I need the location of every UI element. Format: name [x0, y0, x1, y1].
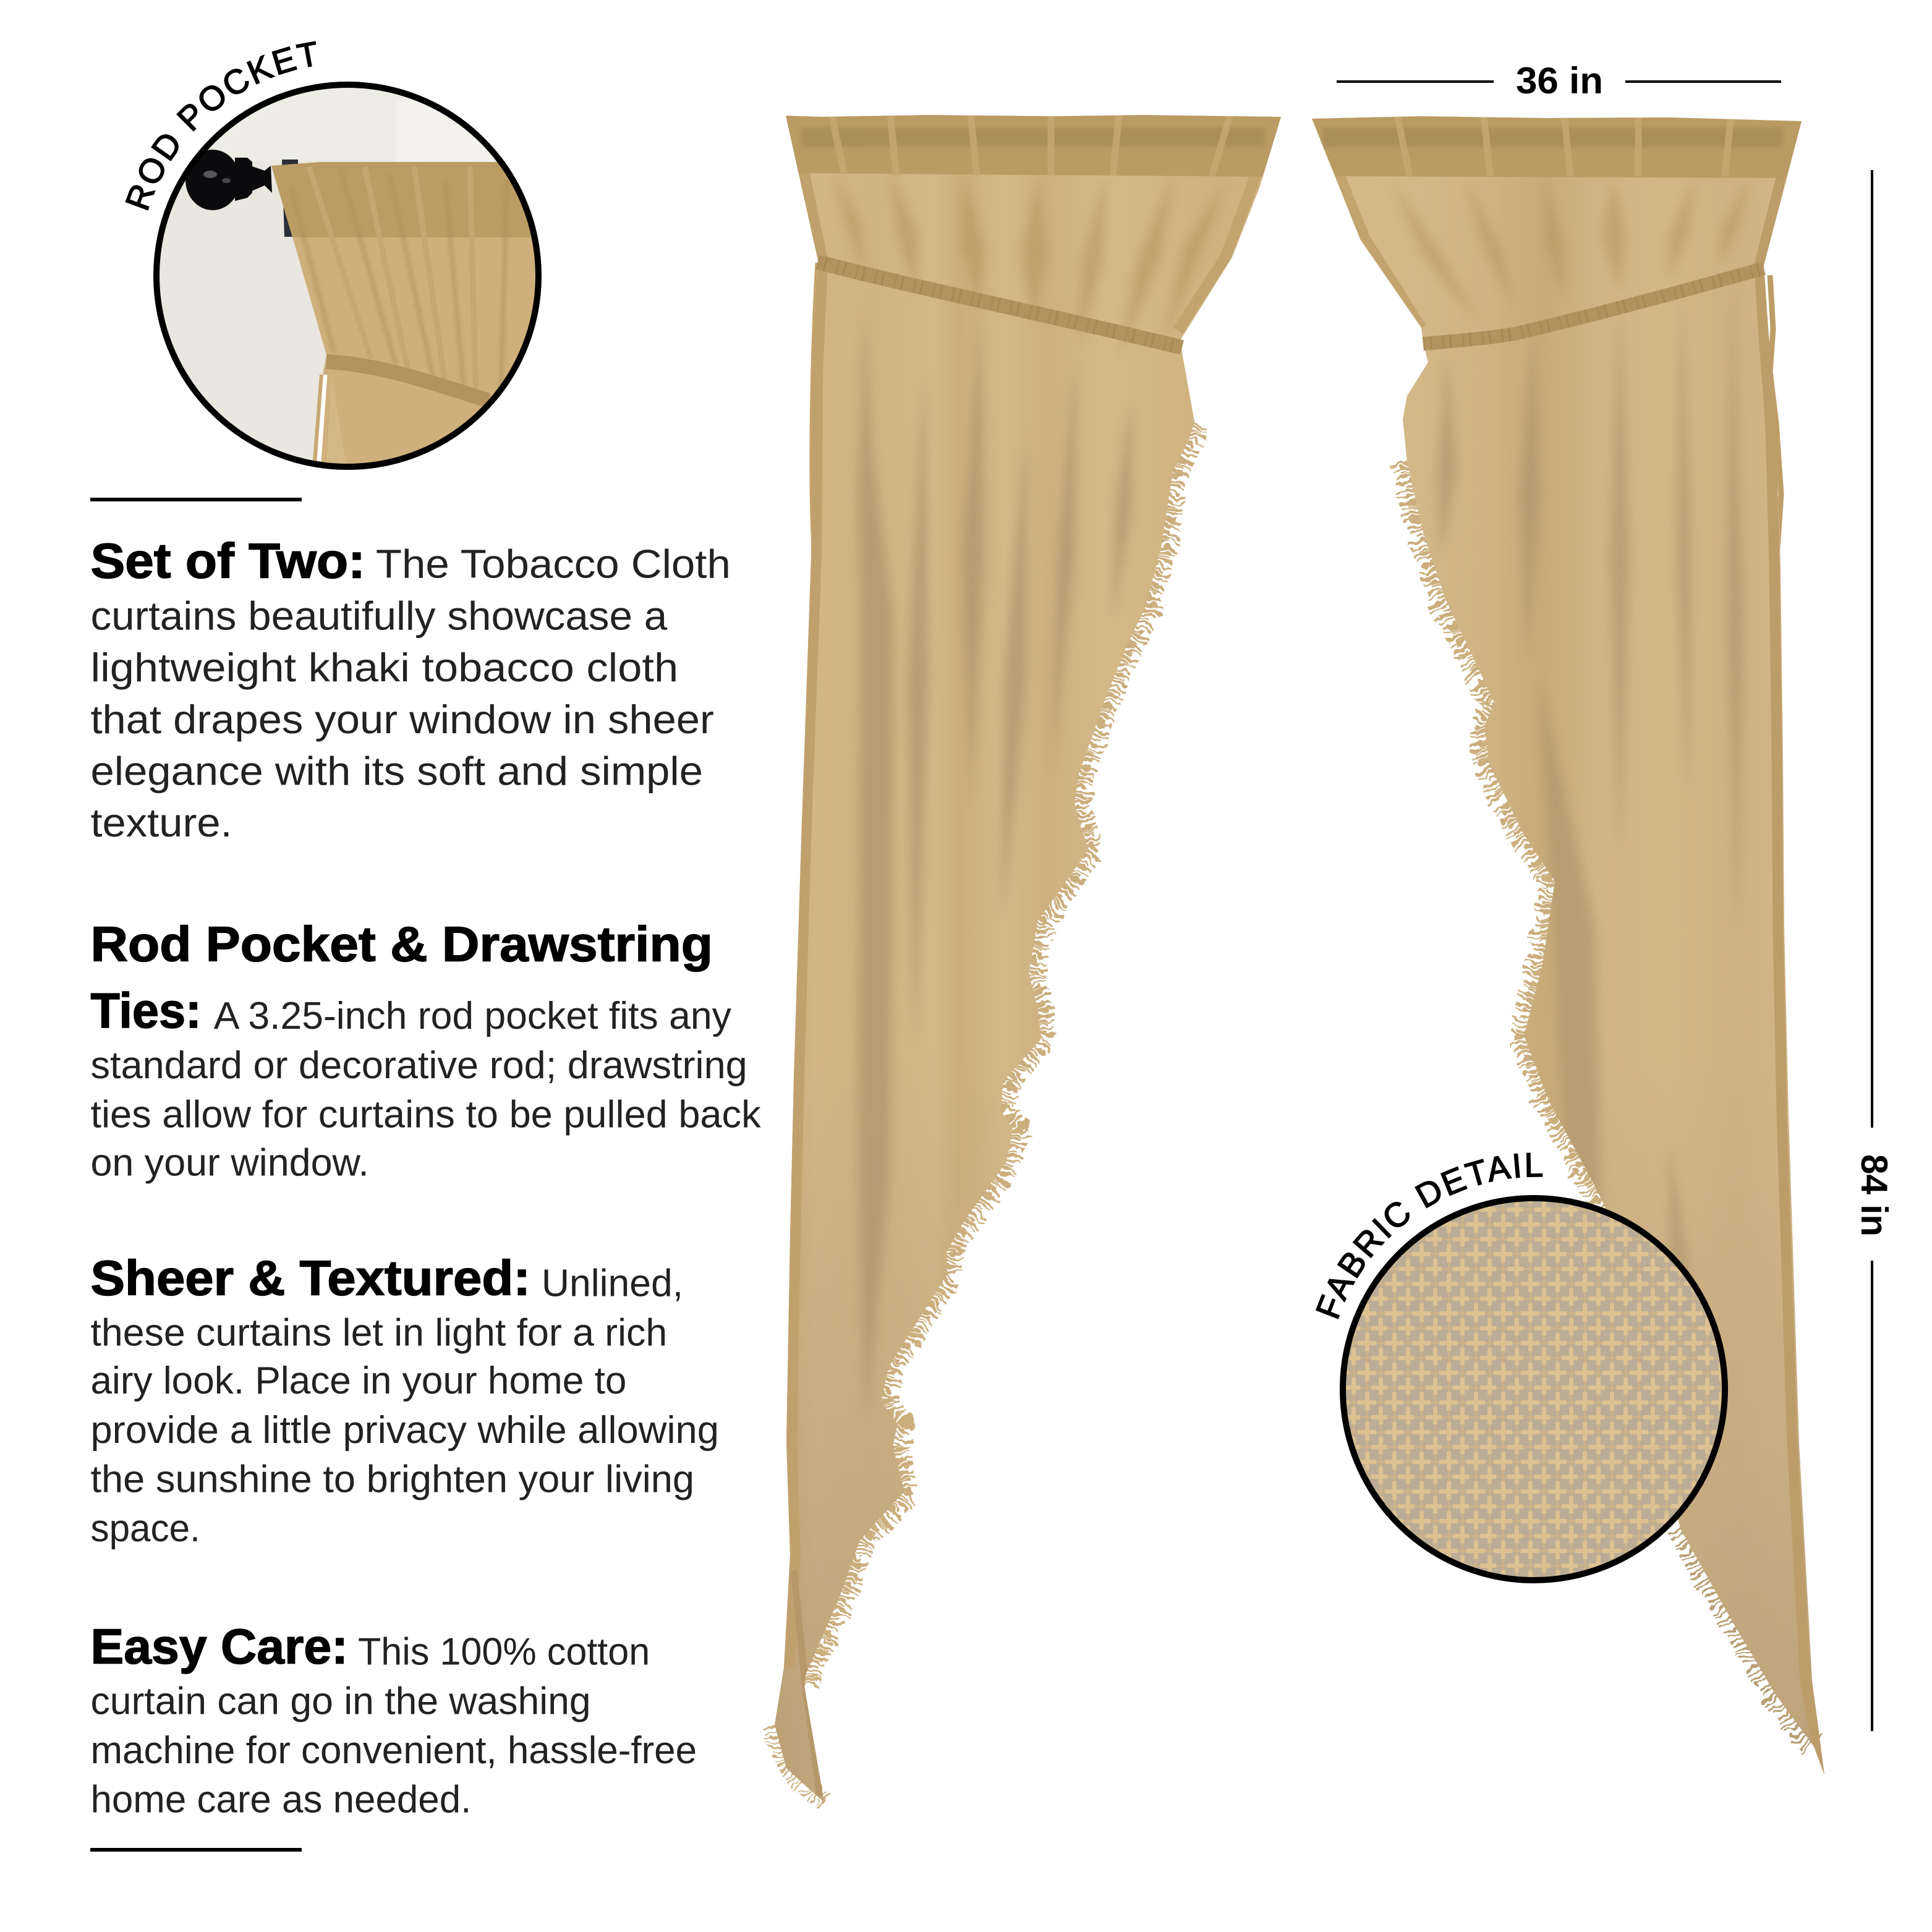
left curtain rod pocket band: [786, 115, 1281, 177]
text block: rod pocket and drawstring ties: [90, 917, 761, 1184]
text block: easy care: [90, 1619, 697, 1821]
heading: rod pocket: Rod Pocket & Drawstring: [90, 917, 713, 972]
fabric weave: [1342, 1198, 1726, 1581]
rod pocket curved label: ROD POCKET: [125, 41, 317, 210]
left curtain tie string: [812, 263, 827, 760]
right curtain fringe: [1407, 462, 1814, 1747]
left curtain lower folds: [858, 309, 1131, 1422]
curtain in rod pocket photo: [271, 162, 544, 476]
text block: sheer and textured: these curtains let in light for a rich: [90, 1311, 667, 1354]
left curtain: [767, 105, 1298, 1824]
fabric detail circle: [1342, 1198, 1726, 1581]
rod pocket photo: [148, 74, 550, 476]
right curtain drawstring band: [1423, 268, 1764, 344]
text block: set of two: The Tobacco Cloth: [376, 542, 731, 587]
right curtain hem: [1760, 121, 1821, 1771]
heading: easy care: Easy Care:: [90, 1619, 348, 1674]
text block: rod pocket and drawstring ties: on your window.: [90, 1141, 369, 1184]
left curtain fabric: [767, 105, 1298, 1824]
text block: sheer and textured: airy look. Place in your home to: [90, 1360, 626, 1402]
text block: set of two: that drapes your window in sheer: [90, 697, 714, 742]
width label: 36 in: [1516, 60, 1603, 101]
rod pocket ring: [156, 85, 538, 467]
right curtain lower folds: [1438, 278, 1743, 1422]
heading: sheer and textured: Sheer & Textured:: [90, 1251, 530, 1306]
right curtain: [1304, 105, 1836, 1793]
text block: sheer and textured: provide a little privacy while allowing: [90, 1409, 719, 1452]
top divider: [90, 498, 302, 501]
text block: set of two: texture.: [90, 800, 232, 845]
text block: set of two: elegance with its soft and simple: [90, 749, 703, 794]
right curtain upper folds: [1391, 179, 1750, 321]
text block: set of two: lightweight khaki tobacco cloth: [90, 645, 678, 690]
right curtain fabric: [1304, 105, 1836, 1793]
left curtain hem: [789, 119, 822, 1667]
text block: sheer and textured: the sunshine to brighten your living: [90, 1458, 694, 1501]
right curtain tie string: [1767, 275, 1781, 778]
right curtain rod pocket band: [1304, 105, 1808, 178]
fabric detail curved label: FABRIC DETAIL: [1316, 1152, 1543, 1319]
text block: sheer and textured: [90, 1251, 719, 1550]
text block: easy care: This 100% cotton: [358, 1631, 650, 1674]
heading: set of two: Set of Two:: [90, 534, 365, 589]
text block: rod pocket and drawstring ties: A 3.25-inch rod pocket fits any: [214, 995, 731, 1037]
text block: sheer and textured: Unlined,: [542, 1262, 683, 1305]
text block: sheer and textured: space.: [90, 1507, 200, 1550]
left curtain fringe: [775, 422, 1194, 1802]
text block: easy care: home care as needed.: [90, 1779, 471, 1821]
text block: set of two: [90, 534, 731, 845]
finial: [185, 150, 272, 210]
bracket: [282, 160, 298, 237]
text block: easy care: curtain can go in the washing: [90, 1680, 591, 1722]
text block: rod pocket and drawstring ties: standard or decorative rod; drawstring: [90, 1044, 747, 1087]
text block: rod pocket and drawstring ties: Ties:: [90, 983, 202, 1038]
text block: rod pocket and drawstring ties: ties allow for curtains to be pulled back: [90, 1094, 761, 1136]
rod pocket detail circle: [148, 74, 550, 476]
height label: 84 in: [1853, 1154, 1895, 1236]
bottom divider: [90, 1848, 302, 1852]
left curtain drawstring band: [818, 262, 1182, 347]
text block: set of two: curtains beautifully showcase a: [90, 593, 668, 638]
left curtain upper folds: [839, 188, 1218, 328]
drawstring in rod pocket photo: [326, 362, 488, 401]
fabric ring: [1343, 1198, 1725, 1580]
text block: easy care: machine for convenient, hassle-free: [90, 1729, 697, 1772]
